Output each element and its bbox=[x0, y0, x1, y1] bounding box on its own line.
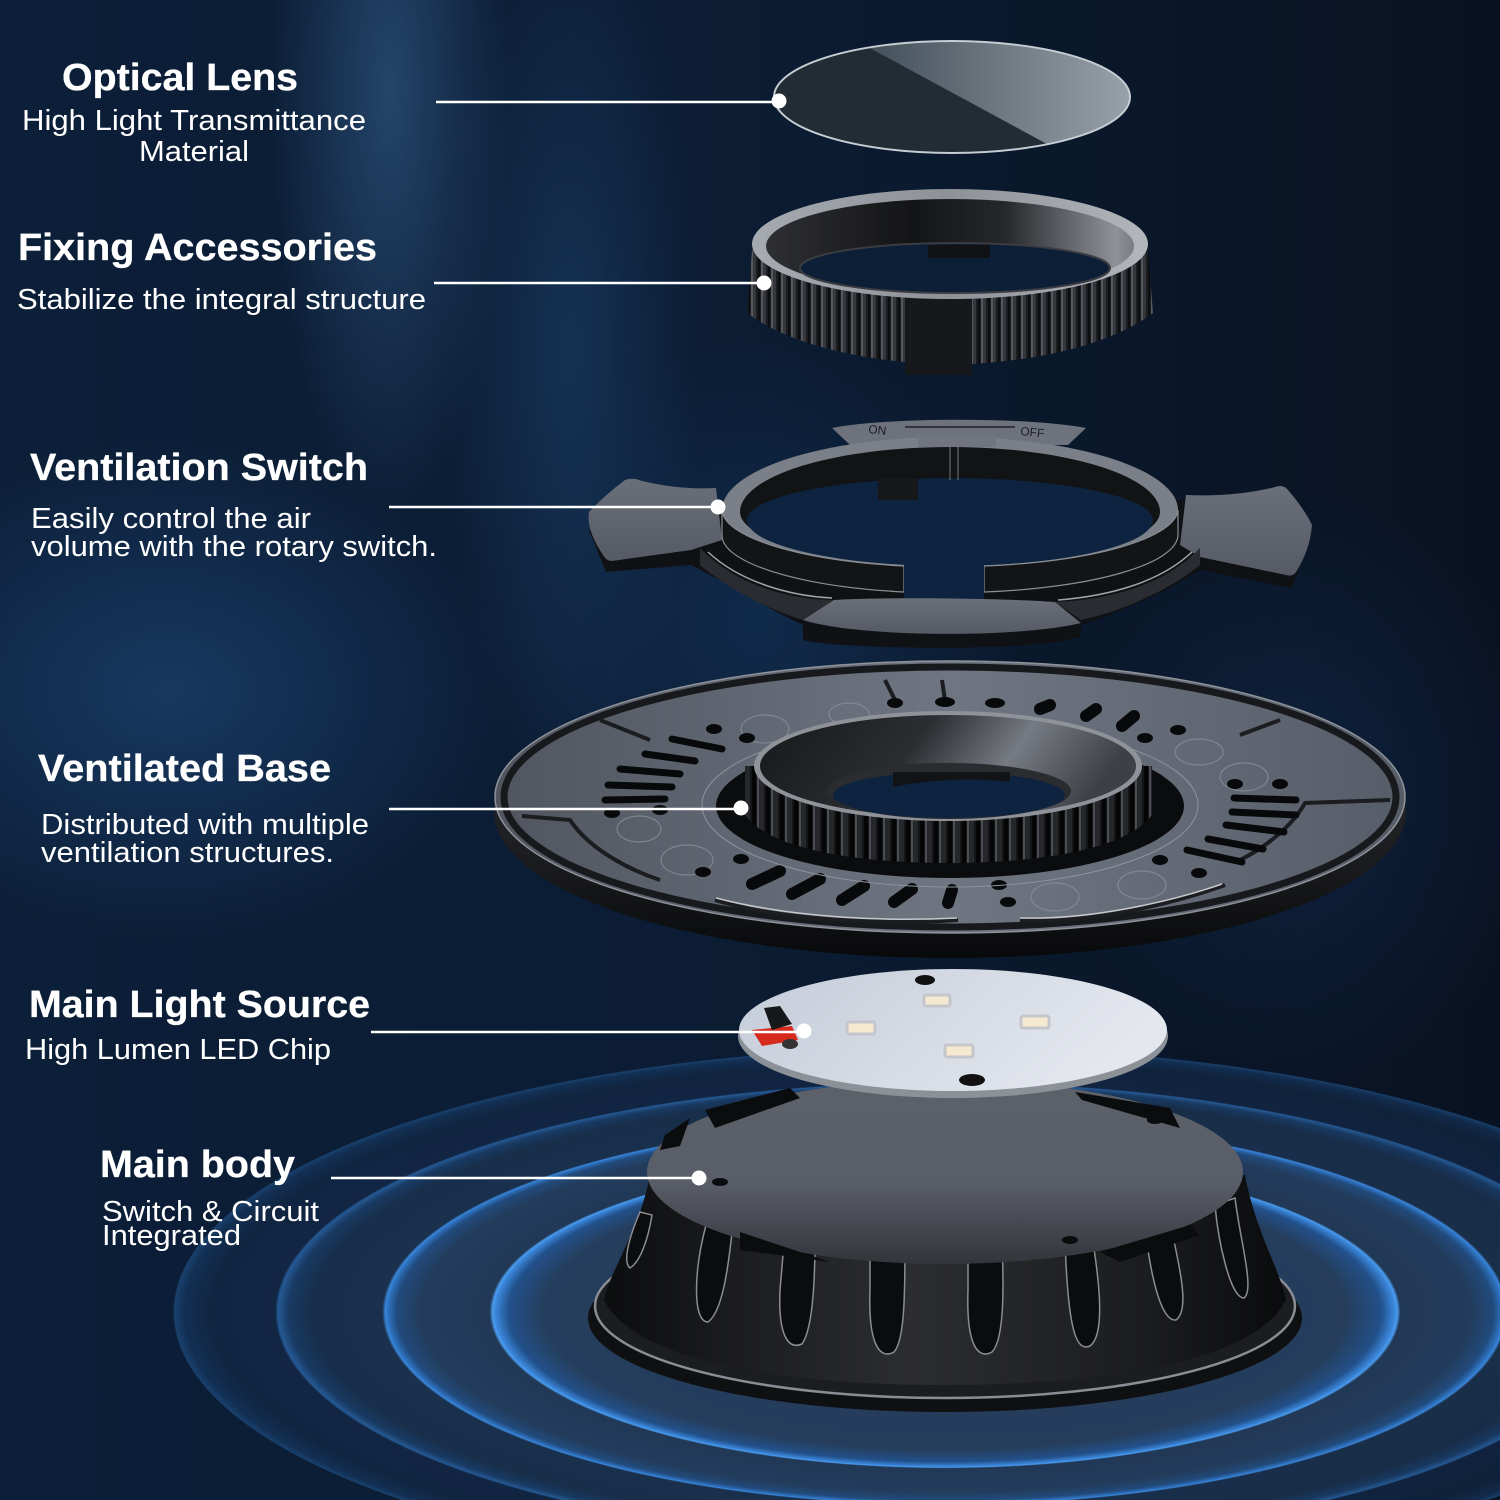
label: ventilation switch bbox=[30, 447, 437, 563]
label: optical lens: High Light Transmittance bbox=[22, 105, 366, 137]
LED chips bbox=[847, 995, 1049, 1057]
ring opening bbox=[747, 478, 1153, 566]
label: optical lens: Material bbox=[139, 136, 249, 168]
top plate bbox=[647, 1080, 1243, 1264]
leader: main body bbox=[331, 1170, 706, 1186]
leader: optical lens bbox=[436, 94, 786, 108]
top tab with ON/OFF bbox=[832, 420, 1086, 445]
label: ventilated base: Distributed with multiple bbox=[41, 809, 369, 841]
base disc bbox=[588, 1224, 1302, 1412]
base plate bbox=[495, 661, 1405, 933]
central collar bbox=[702, 711, 1198, 887]
label: fixing accessories: Stabilize the integral structure bbox=[17, 284, 426, 316]
label: ventilated base bbox=[38, 748, 369, 869]
leader: main light source bbox=[371, 1024, 812, 1038]
ventilation switch bbox=[589, 420, 1312, 648]
wires bbox=[752, 1026, 798, 1046]
side wings bbox=[589, 479, 722, 561]
main light source LED board bbox=[738, 969, 1168, 1098]
label: optical lens: Optical Lens bbox=[62, 57, 298, 99]
front ring wall bbox=[722, 510, 1178, 592]
label: fixing accessories: Fixing Accessories bbox=[18, 227, 377, 269]
main body bbox=[588, 1080, 1302, 1412]
label: ventilated base: Ventilated Base bbox=[38, 748, 331, 790]
ventilated base bbox=[494, 661, 1406, 958]
plate ridges bbox=[522, 680, 1390, 922]
front wing bbox=[803, 598, 1081, 634]
base body bbox=[494, 666, 1406, 958]
label: main body: Integrated bbox=[102, 1220, 241, 1252]
top tab with ON/OFF: OFF bbox=[1020, 424, 1045, 440]
label: ventilation switch: volume with the rotary switch. bbox=[31, 531, 437, 563]
leader: fixing accessories bbox=[434, 276, 772, 290]
lower flange bbox=[700, 548, 1200, 620]
ring rim bbox=[722, 437, 1178, 568]
vent grooves bbox=[627, 1198, 1248, 1354]
label: ventilated base: ventilation structures. bbox=[41, 837, 334, 869]
fixing accessories ring bbox=[747, 189, 1153, 375]
label: ventilation switch: Easily control the air bbox=[31, 503, 311, 535]
plate notches bbox=[660, 1088, 1200, 1262]
label: fixing accessories bbox=[17, 227, 426, 316]
label: main light source: High Lumen LED Chip bbox=[25, 1034, 331, 1066]
label: optical lens bbox=[22, 57, 366, 168]
top tab with ON/OFF: ON bbox=[868, 422, 887, 438]
small holes bbox=[604, 697, 1288, 907]
ring inner wall bbox=[740, 447, 1160, 564]
wing thickness bbox=[589, 500, 1312, 648]
label: main body bbox=[100, 1144, 319, 1252]
ventilation slots bbox=[605, 705, 1296, 903]
leader: ventilation switch bbox=[389, 500, 726, 514]
mounting holes bbox=[915, 975, 935, 985]
leader: ventilated base bbox=[389, 800, 748, 816]
label: main body: Main body bbox=[100, 1144, 295, 1186]
optical lens bbox=[774, 40, 1140, 153]
label: ventilation switch: Ventilation Switch bbox=[30, 447, 368, 489]
label: main light source: Main Light Source bbox=[29, 984, 370, 1026]
faint circles bbox=[617, 703, 1268, 911]
label: main light source bbox=[25, 984, 370, 1066]
label: main body: Switch & Circuit bbox=[102, 1196, 319, 1228]
flared side bbox=[604, 1175, 1286, 1385]
